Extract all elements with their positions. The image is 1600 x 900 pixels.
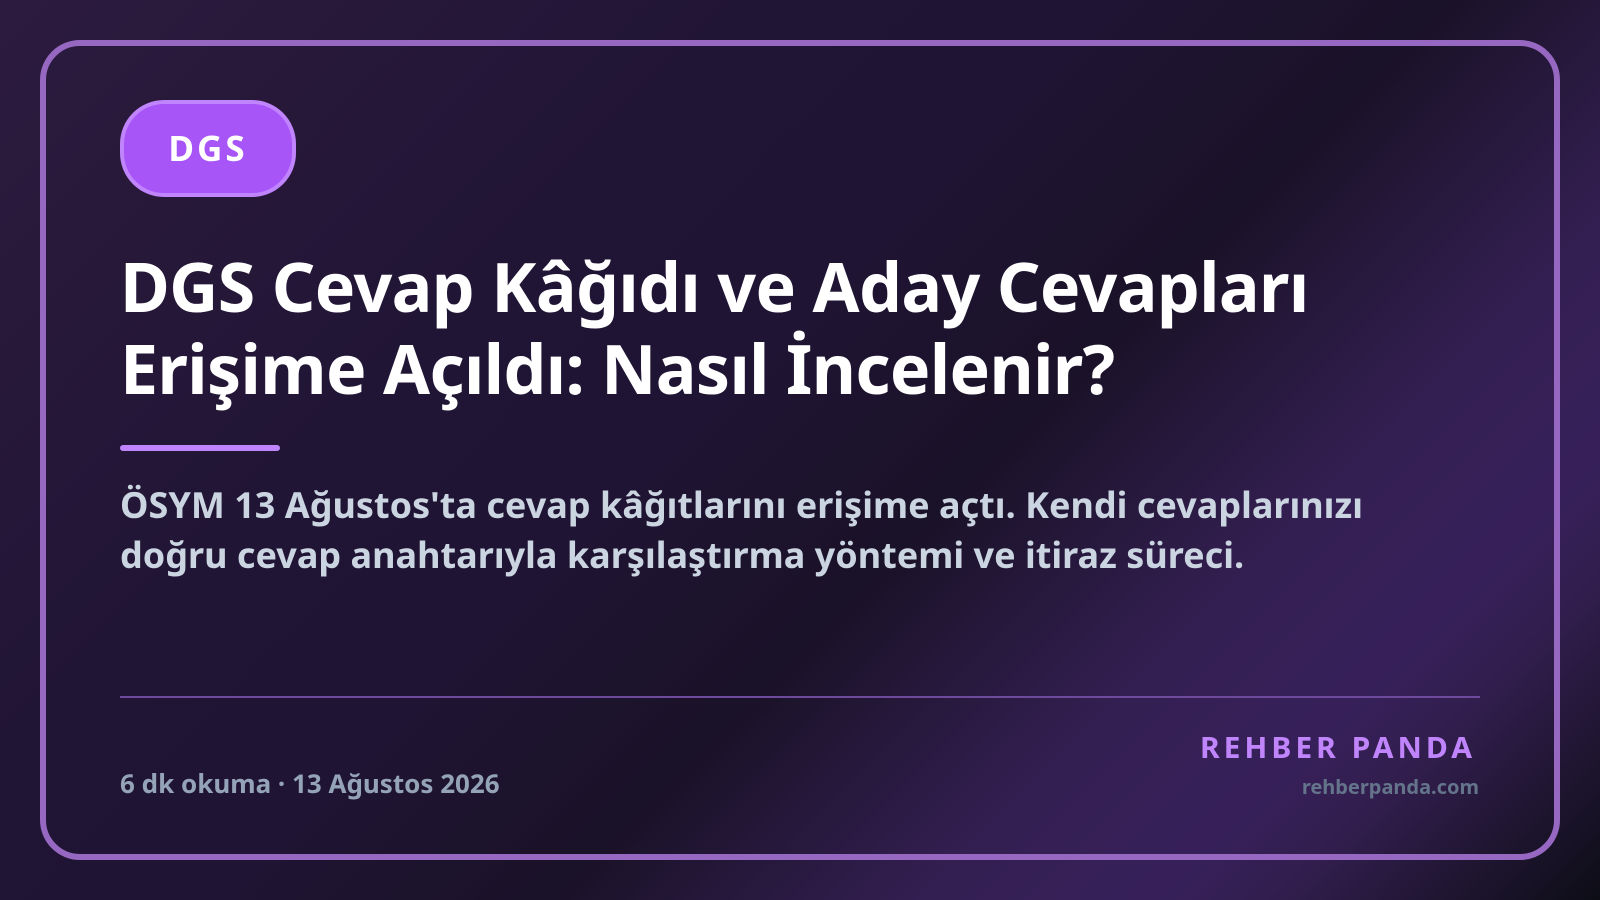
title: Erişime Açıldı: Nasıl İncelenir? <box>120 321 1114 414</box>
category badge: DGS <box>168 125 248 172</box>
footer divider <box>120 696 1480 698</box>
title: DGS Cevap Kâğıdı ve Aday Cevapları <box>120 239 1309 332</box>
subtitle: ÖSYM 13 Ağustos'ta cevap kâğıtlarını erişime açtı. Kendi cevaplarınızı <box>120 480 1363 529</box>
subtitle: doğru cevap anahtarıyla karşılaştırma yöntemi ve itiraz süreci. <box>120 530 1244 579</box>
website: rehberpanda.com <box>1302 773 1479 800</box>
title <box>120 239 1309 414</box>
accent bar <box>120 445 280 451</box>
brand name: REHBER PANDA <box>1200 726 1476 767</box>
subtitle <box>120 480 1363 579</box>
category badge <box>120 100 296 197</box>
reading time and date: 6 dk okuma · 13 Ağustos 2026 <box>120 765 500 801</box>
